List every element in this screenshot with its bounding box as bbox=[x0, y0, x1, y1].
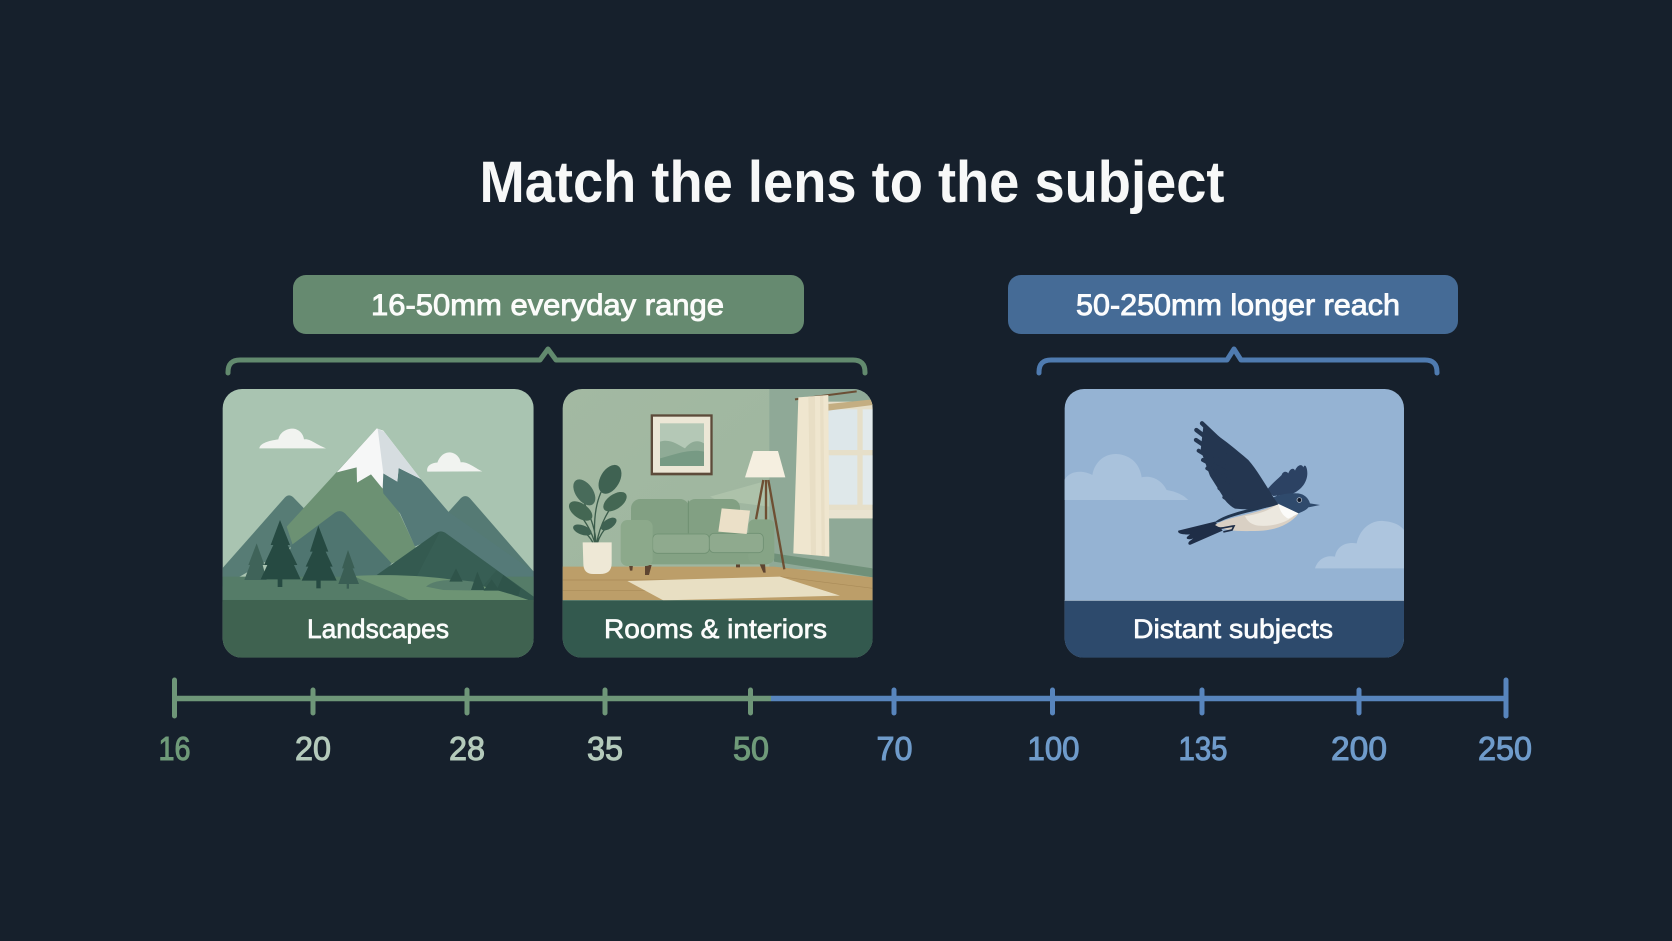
icon: cloud right bbox=[1315, 521, 1404, 568]
focal length axis bbox=[174, 680, 1506, 716]
icon: framed picture bbox=[651, 414, 713, 475]
pill: 50-250mm longer reach: 50-250mm longer reach bbox=[1076, 289, 1400, 322]
icon: floor bbox=[562, 567, 873, 600]
card: Distant subjects: Distant subjects bbox=[1133, 614, 1333, 644]
axis labels: 70 bbox=[876, 730, 912, 767]
icon: cloud left bbox=[1064, 454, 1188, 500]
axis labels: 28 bbox=[449, 730, 485, 767]
axis labels: 200 bbox=[1331, 730, 1387, 767]
icon: potted plant bbox=[569, 464, 627, 574]
icon: cloud left bbox=[259, 429, 326, 448]
card: Rooms and interiors bbox=[562, 389, 873, 658]
pill: 16-50mm everyday range: 16-50mm everyday range bbox=[371, 289, 724, 322]
card: Landscapes: Landscapes bbox=[307, 614, 449, 644]
axis labels: 250 bbox=[1478, 730, 1532, 767]
axis labels: 135 bbox=[1178, 730, 1228, 767]
icon: rug bbox=[627, 577, 840, 600]
icon: sofa bbox=[621, 499, 774, 575]
axis ticks: green bbox=[174, 680, 750, 716]
card: Landscapes bbox=[222, 389, 534, 658]
axis labels: 35 bbox=[587, 730, 623, 767]
axis labels: 16 bbox=[158, 730, 190, 767]
axis labels: 100 bbox=[1028, 730, 1080, 767]
icon: snow cap bbox=[337, 428, 421, 489]
pill: 50-250mm longer reach bbox=[1008, 275, 1458, 334]
icon: curtain bbox=[793, 391, 857, 557]
title: Match the lens to the subject bbox=[480, 150, 1224, 215]
icon: floor lamp bbox=[745, 451, 785, 569]
card: Rooms and interiors: Rooms & interiors bbox=[604, 614, 827, 644]
icon: cloud right bbox=[427, 452, 482, 472]
axis ticks: blue bbox=[894, 680, 1506, 716]
pill: 16-50mm everyday range bbox=[293, 275, 804, 334]
icon: wing feathers bbox=[1196, 423, 1238, 507]
bracket: everyday range bbox=[228, 349, 865, 373]
bracket: longer reach bbox=[1039, 349, 1437, 373]
icon: window bbox=[828, 399, 873, 518]
card: Distant subjects bbox=[1064, 389, 1404, 658]
icon: pine trees bbox=[244, 543, 267, 580]
axis labels: 50 bbox=[733, 730, 769, 767]
axis labels bbox=[158, 730, 1532, 767]
axis labels: 20 bbox=[295, 730, 331, 767]
icon: flying bird bbox=[1178, 423, 1320, 545]
